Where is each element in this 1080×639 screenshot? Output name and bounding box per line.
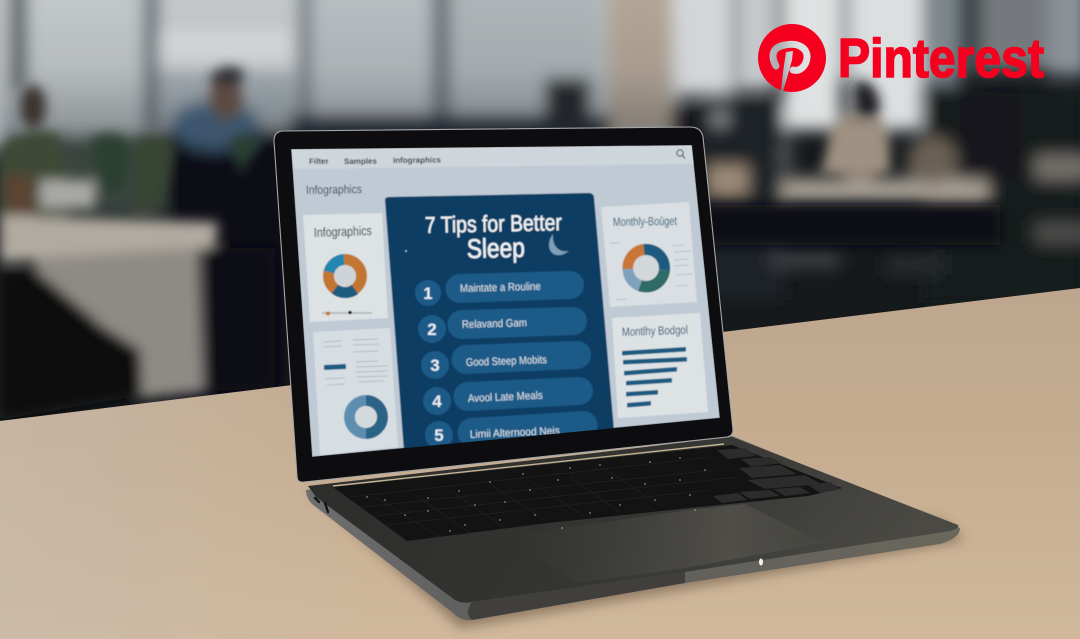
tip 3: 3 xyxy=(430,356,440,375)
nav: samples: Samples xyxy=(344,157,377,166)
bar chart xyxy=(622,347,687,408)
tip 1: Maintate a Rouline xyxy=(460,281,541,295)
top navigation bar xyxy=(291,145,694,169)
small dark bar xyxy=(324,364,346,370)
tip 4: 4 xyxy=(432,392,442,411)
wordmark: Pinterest xyxy=(838,27,1044,89)
donut chart xyxy=(350,400,382,434)
tip 4 xyxy=(423,377,593,415)
card title: Montlhy Bodgol xyxy=(622,323,688,339)
wooden table xyxy=(0,288,1080,639)
tip 2: 2 xyxy=(427,320,437,339)
tip 1: 1 xyxy=(423,284,433,303)
laptop base xyxy=(306,436,960,620)
tip 3 xyxy=(421,341,591,379)
tip 1 xyxy=(415,271,584,306)
pinterest logo xyxy=(758,24,1044,92)
trackpad xyxy=(512,504,823,583)
icon: pinterest circle xyxy=(758,24,826,92)
tip 2 xyxy=(418,307,587,343)
panel title: 7 Tips for Better xyxy=(425,209,562,238)
nav: filter: Filter xyxy=(309,157,329,166)
hinge strip xyxy=(333,444,724,486)
card: monthly budget bars xyxy=(612,313,708,418)
tip 5 xyxy=(425,411,598,449)
laptop screen xyxy=(291,145,720,457)
icon: moon xyxy=(549,234,569,255)
front edge shadowed part xyxy=(468,572,685,620)
center panel: 7 tips for better sleep xyxy=(385,193,614,452)
tip 5: Limii Alternood Neis xyxy=(470,425,561,441)
card title: Infographics xyxy=(314,223,372,240)
tip 4: Avool Late Meals xyxy=(468,390,543,405)
panel star xyxy=(405,250,407,252)
icon: search xyxy=(677,150,685,158)
laptop xyxy=(274,127,960,620)
section heading: Infographics xyxy=(306,182,362,197)
tip 3: Good Steep Mobits xyxy=(466,354,547,369)
donut chart xyxy=(328,260,362,293)
card title: Monthly-Boûget xyxy=(613,214,678,229)
small labels xyxy=(610,243,692,300)
small text lines xyxy=(323,339,388,385)
nav: infographics: Infographics xyxy=(393,155,442,165)
tip 5: 5 xyxy=(434,426,444,445)
lid frame xyxy=(274,127,733,482)
panel title second line: Sleep xyxy=(466,233,525,264)
card: infographics donut xyxy=(303,213,388,322)
tip 2: Relavand Gam xyxy=(462,317,527,331)
keyboard xyxy=(333,445,842,541)
card: article with donut xyxy=(313,328,398,455)
laptop shadow xyxy=(310,490,965,628)
power LED xyxy=(759,558,763,566)
chart legend xyxy=(322,311,372,316)
side ports xyxy=(315,498,328,512)
card: monthly budget donut xyxy=(601,202,697,307)
screen lid xyxy=(274,127,733,486)
donut chart xyxy=(628,250,664,287)
